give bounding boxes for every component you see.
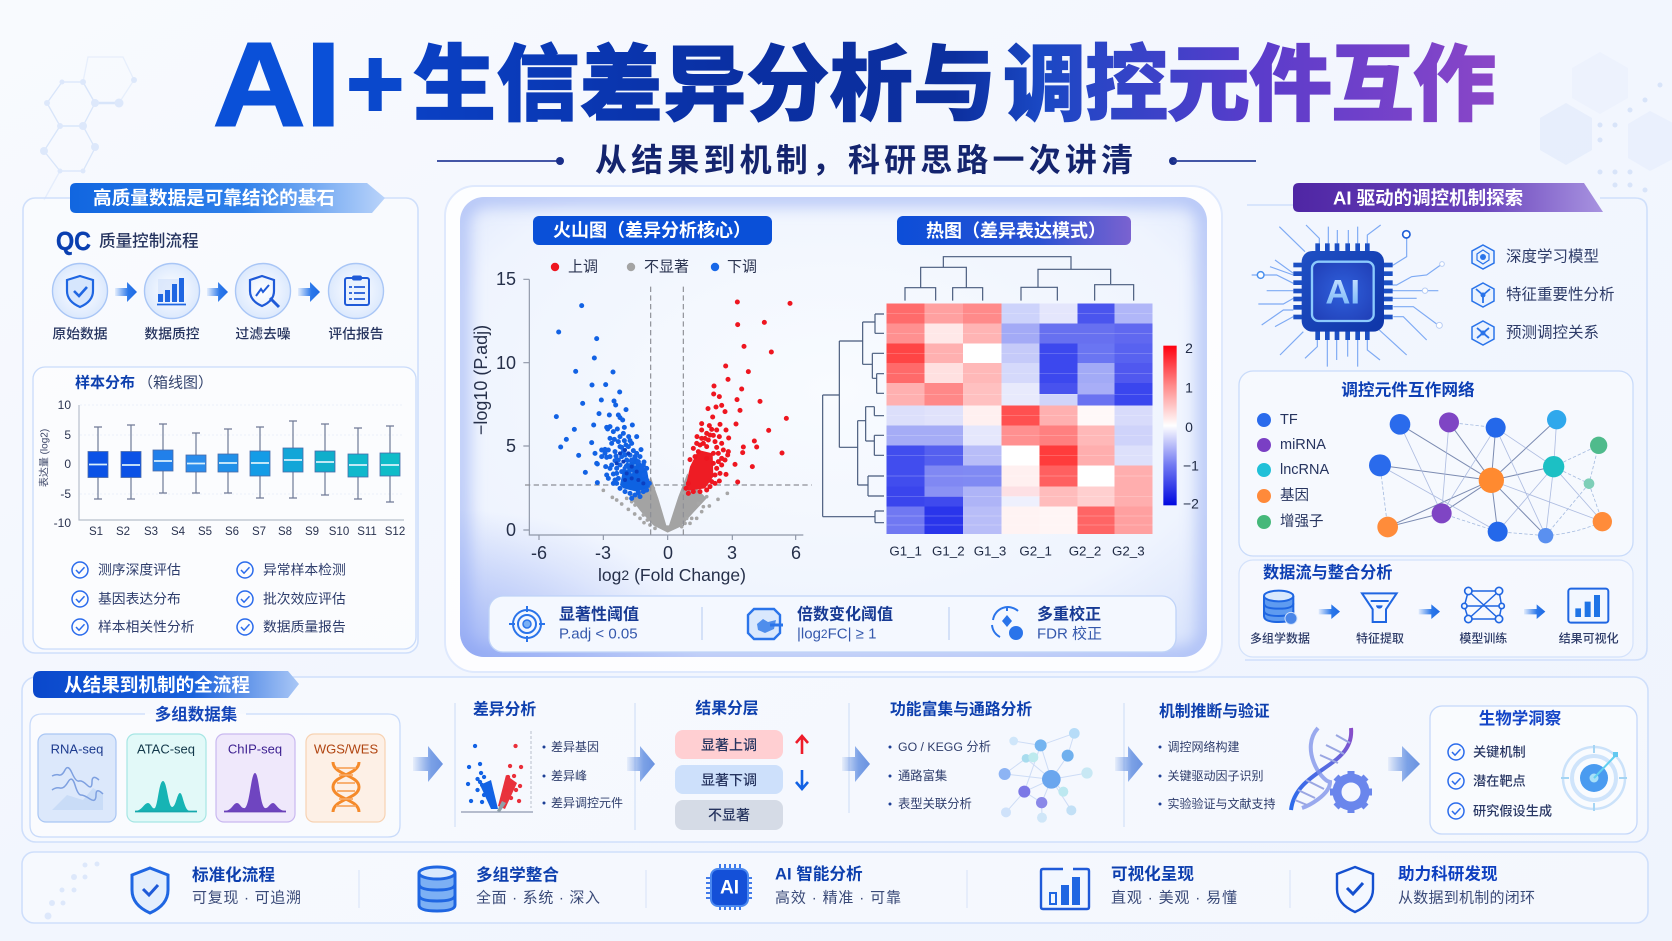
item: AI analysis: AI (720, 878, 739, 898)
heading: QC: QC (56, 228, 91, 256)
step: mechanism: 实验验证与文献支持 (1168, 796, 1276, 811)
step: result tiers: 结果分层 (695, 700, 759, 718)
title: 调控元件互作 (1003, 38, 1496, 132)
colorbar: −1 (1183, 457, 1199, 473)
step: features (1356, 593, 1404, 645)
checklist: QC items (72, 562, 346, 635)
step: differential analysis: 差异调控元件 (551, 796, 623, 810)
step: training (1459, 587, 1507, 645)
heading: omics: 多组数据集 (155, 704, 238, 724)
arrow (115, 282, 137, 302)
icon: target (1561, 745, 1627, 811)
panel: AI mechanism (22, 183, 1648, 923)
banner: workflow (33, 671, 299, 698)
chart: boxplot: S10 (329, 526, 349, 538)
panel: regulatory network (1239, 371, 1633, 556)
QC flow (52, 264, 384, 342)
chart: volcano plot: 0 (506, 520, 516, 540)
arrow (413, 746, 443, 782)
banner: heatmap (897, 216, 1131, 245)
red points (686, 302, 790, 493)
arrow (298, 282, 320, 302)
arrow (1388, 746, 1420, 782)
card: ATAC-seq: ATAC-seq (137, 742, 195, 756)
chart: heatmap (823, 257, 1199, 558)
icon: AI chip (1252, 225, 1444, 367)
legend: node types: miRNA (1280, 437, 1326, 453)
subtitle (437, 142, 1256, 178)
panel: biological insight (1430, 706, 1637, 834)
arrow (842, 746, 870, 782)
arrow (1319, 604, 1340, 619)
threshold: FDR: 多重校正 (1037, 604, 1101, 624)
chart: volcano plot: -6 (531, 543, 547, 563)
threshold: fold change (748, 604, 893, 642)
icon: AI chip: AI (1325, 273, 1360, 311)
chart: boxplot: 表达量 (log2) (38, 429, 50, 487)
background decor: hexagons and dots right (1540, 52, 1672, 192)
icon: down arrow (796, 770, 808, 789)
banner: workflow: 从结果到机制的全流程 (64, 674, 250, 696)
step: differential analysis: 差异分析 (473, 700, 536, 718)
background decor: hexagons left (40, 57, 137, 200)
dendrograms (823, 257, 1134, 523)
step: visualize (1559, 589, 1619, 645)
chart: boxplot: S3 (144, 526, 158, 538)
chart: mini volcano (461, 731, 533, 812)
legend: volcano: 不显著 (644, 258, 689, 276)
chart: network (1369, 410, 1612, 543)
title: + (346, 28, 404, 140)
chart: boxplot: S11 (357, 526, 377, 538)
chart: boxplot: S9 (305, 526, 319, 538)
threshold bar (489, 596, 1176, 652)
banner: volcano (533, 216, 772, 245)
card: ChIP-seq (216, 734, 295, 822)
item: AI analysis (706, 864, 901, 910)
chart: boxplot: S4 (171, 526, 186, 538)
banner: AI: AI 驱动的调控机制探索 (1333, 188, 1523, 208)
step: result tiers: 显著下调 (701, 772, 757, 788)
item: feature importance (1472, 283, 1615, 307)
panel: data flow (1239, 560, 1633, 657)
banner: data quality (70, 183, 385, 213)
chart: volcano plot: 3 (727, 543, 737, 563)
chart: boxplot: 0 (64, 457, 71, 471)
colorbar: 1 (1185, 380, 1193, 396)
step: data QC: 数据质控 (144, 326, 200, 342)
item: feature importance: 特征重要性分析 (1506, 286, 1615, 304)
chart: volcano plot: 6 (791, 543, 801, 563)
heading: network: 调控元件互作网络 (1341, 380, 1475, 400)
banner: heatmap: 热图（差异表达模式） (926, 220, 1106, 241)
item: multi-omics: 多组学整合 (476, 864, 559, 884)
chart: volcano plot: −log10 (P.adj) (471, 325, 491, 435)
step: raw data (52, 264, 108, 342)
chart: boxplot: -10 (54, 516, 71, 530)
colorbar: 0 (1185, 419, 1193, 435)
step: omics data: 多组学数据 (1250, 630, 1310, 645)
step: differential analysis: 差异峰 (551, 769, 587, 783)
panel: sample boxplot (33, 367, 416, 649)
arrow (627, 746, 655, 782)
chart: volcano plot: 0 (663, 543, 673, 563)
item: AI analysis: AI 智能分析 (775, 864, 863, 884)
card: WGS/WES: WGS/WES (314, 742, 378, 756)
card: WGS/WES (306, 734, 385, 822)
threshold: fold change: 倍数变化阈值 (797, 604, 893, 624)
arrow (1115, 746, 1143, 782)
chart: boxplot: -5 (60, 487, 71, 501)
blue points (556, 306, 650, 498)
card: RNA-seq: RNA-seq (51, 742, 103, 756)
heading: QC (56, 228, 199, 256)
chart: volcano plot: 15 (496, 269, 516, 289)
title: AI (213, 18, 341, 152)
chart: heatmap: G1_1 (889, 543, 922, 558)
chart: boxplot: S12 (385, 526, 405, 538)
step: mechanism: 调控网络构建 (1168, 739, 1240, 754)
chart: heatmap: G1_3 (974, 543, 1006, 558)
chart: volcano plot: 10 (496, 353, 516, 373)
step: result tiers: 不显著 (708, 807, 750, 823)
item: visualization (1041, 864, 1237, 909)
banner: data quality: 高质量数据是可靠结论的基石 (93, 188, 335, 208)
item: multi-omics: 全面 · 系统 · 深入 (476, 888, 600, 906)
step: result tiers (675, 700, 808, 830)
panel: biological insight: 关键机制 (1473, 744, 1526, 760)
card: ChIP-seq: ChIP-seq (228, 742, 282, 756)
step: raw data: 原始数据 (52, 326, 108, 342)
legend: node types: 增强子 (1280, 513, 1324, 530)
icon: up arrow (796, 736, 808, 754)
colorbar: 2 (1185, 340, 1193, 356)
legend: node types: TF (1280, 412, 1298, 428)
legend: volcano: 上调 (568, 258, 598, 276)
heading: sample distribution: 样本分布（箱线图） (75, 373, 213, 391)
item: deep learning: 深度学习模型 (1506, 248, 1599, 266)
chart: heatmap: G2_1 (1019, 543, 1052, 558)
step: omics data (1250, 591, 1310, 645)
title (213, 18, 1496, 152)
step: result tiers: 显著上调 (701, 737, 757, 753)
threshold: significance: P.adj < 0.05 (559, 626, 638, 642)
checklist: QC items: 数据质量报告 (263, 620, 346, 634)
step: enrichment: GO / KEGG 分析 (898, 740, 991, 754)
step: training: 模型训练 (1459, 630, 1507, 645)
item: predict regulation (1472, 321, 1599, 345)
threshold: fold change: |log2FC| ≥ 1 (797, 626, 876, 642)
item: predict regulation: 预测调控关系 (1506, 324, 1599, 342)
subtitle: 从结果到机制，科研思路一次讲清 (595, 142, 1133, 178)
item: discovery (1337, 864, 1535, 912)
chart: heatmap: G2_2 (1069, 543, 1101, 558)
chart: boxplot (38, 398, 405, 538)
chart: volcano plot: log2 (Fold Change) (598, 565, 746, 585)
threshold: significance: 显著性阈值 (559, 604, 639, 624)
item: AI analysis: 高效 · 精准 · 可靠 (775, 890, 901, 906)
banner: AI (1293, 183, 1603, 212)
item: discovery: 助力科研发现 (1398, 864, 1498, 884)
panel: biological insight: 研究假设生成 (1473, 802, 1552, 818)
panel: biological insight: 生物学洞察 (1479, 708, 1562, 728)
step: enrichment (888, 700, 1093, 823)
panel: workflow (22, 671, 1648, 842)
step: report (328, 264, 384, 342)
chart: boxplot: 10 (58, 398, 71, 412)
step: data QC (144, 264, 200, 342)
step: mechanism: 关键驱动因子识别 (1168, 769, 1264, 783)
chart: boxplot: 5 (64, 428, 71, 442)
legend: node types (1257, 412, 1329, 530)
chart: boxplot: S5 (198, 526, 212, 538)
threshold: significance (509, 604, 639, 642)
panel: data quality (23, 183, 418, 653)
item: visualization: 可视化呈现 (1111, 864, 1194, 884)
heading: QC: 质量控制流程 (99, 232, 199, 250)
chart: boxplot: S1 (89, 526, 103, 538)
item: standardized: 可复现 · 可追溯 (192, 888, 301, 906)
arrow (1524, 604, 1545, 619)
checklist: QC items: 批次效应评估 (263, 590, 346, 606)
step: mechanism (1158, 702, 1372, 813)
step: enrichment: 通路富集 (898, 768, 947, 783)
colorbar (1163, 340, 1199, 511)
chart: boxplot: S7 (252, 526, 266, 538)
chart: pathway network (999, 728, 1093, 823)
panel: center charts (445, 186, 1222, 672)
step: differential analysis: 差异基因 (551, 740, 599, 754)
legend: volcano (551, 258, 757, 276)
item: standardized (132, 864, 301, 913)
item: discovery: 从数据到机制的闭环 (1398, 890, 1535, 906)
chart: volcano plot: -3 (595, 543, 611, 563)
gray points (603, 473, 727, 533)
threshold: FDR: FDR 校正 (1037, 626, 1102, 642)
legend: node types: lncRNA (1280, 462, 1329, 478)
step: filter (235, 264, 291, 342)
chart: volcano plot (471, 269, 812, 585)
chart: boxplot: S8 (278, 526, 292, 538)
chart: heatmap: G1_2 (932, 543, 965, 558)
checklist: QC items: 测序深度评估 (98, 562, 181, 578)
card: ATAC-seq (127, 734, 206, 822)
panel: bottom benefits (22, 852, 1648, 923)
step: differential analysis (461, 700, 623, 812)
heading: data flow: 数据流与整合分析 (1263, 563, 1392, 582)
card: RNA-seq (38, 734, 116, 822)
arrow (1419, 604, 1440, 619)
item: multi-omics (419, 864, 600, 911)
panel: biological insight: 潜在靶点 (1473, 772, 1526, 788)
step: visualize: 结果可视化 (1559, 630, 1619, 645)
item: standardized: 标准化流程 (192, 864, 275, 884)
panel: omics datasets (30, 704, 400, 837)
step: filter: 过滤去噪 (235, 326, 291, 342)
list: AI models (1472, 245, 1615, 345)
colorbar: −2 (1183, 495, 1199, 511)
icon: DNA and gear (1291, 728, 1372, 813)
checklist: QC items: 样本相关性分析 (98, 620, 195, 634)
step: features: 特征提取 (1356, 630, 1404, 645)
arrow (207, 282, 228, 302)
step: enrichment: 功能富集与通路分析 (890, 700, 1032, 718)
chart: heatmap: G2_3 (1112, 543, 1145, 558)
chart: boxplot: S6 (225, 526, 239, 538)
chart: boxplot: S2 (116, 526, 130, 538)
step: report: 评估报告 (328, 326, 384, 342)
legend: volcano: 下调 (727, 258, 757, 276)
step: enrichment: 表型关联分析 (898, 797, 972, 811)
item: visualization: 直观 · 美观 · 易懂 (1111, 890, 1237, 906)
banner: volcano: 火山图（差异分析核心） (553, 220, 751, 240)
title: 生信差异分析与 (413, 38, 996, 132)
checklist: QC items: 基因表达分布 (98, 590, 181, 606)
item: deep learning (1472, 245, 1599, 269)
chart: volcano plot: 5 (506, 436, 516, 456)
legend: node types: 基因 (1280, 487, 1309, 504)
checklist: QC items: 异常样本检测 (263, 562, 346, 578)
step: mechanism: 机制推断与验证 (1159, 702, 1270, 720)
threshold: FDR (992, 604, 1102, 642)
